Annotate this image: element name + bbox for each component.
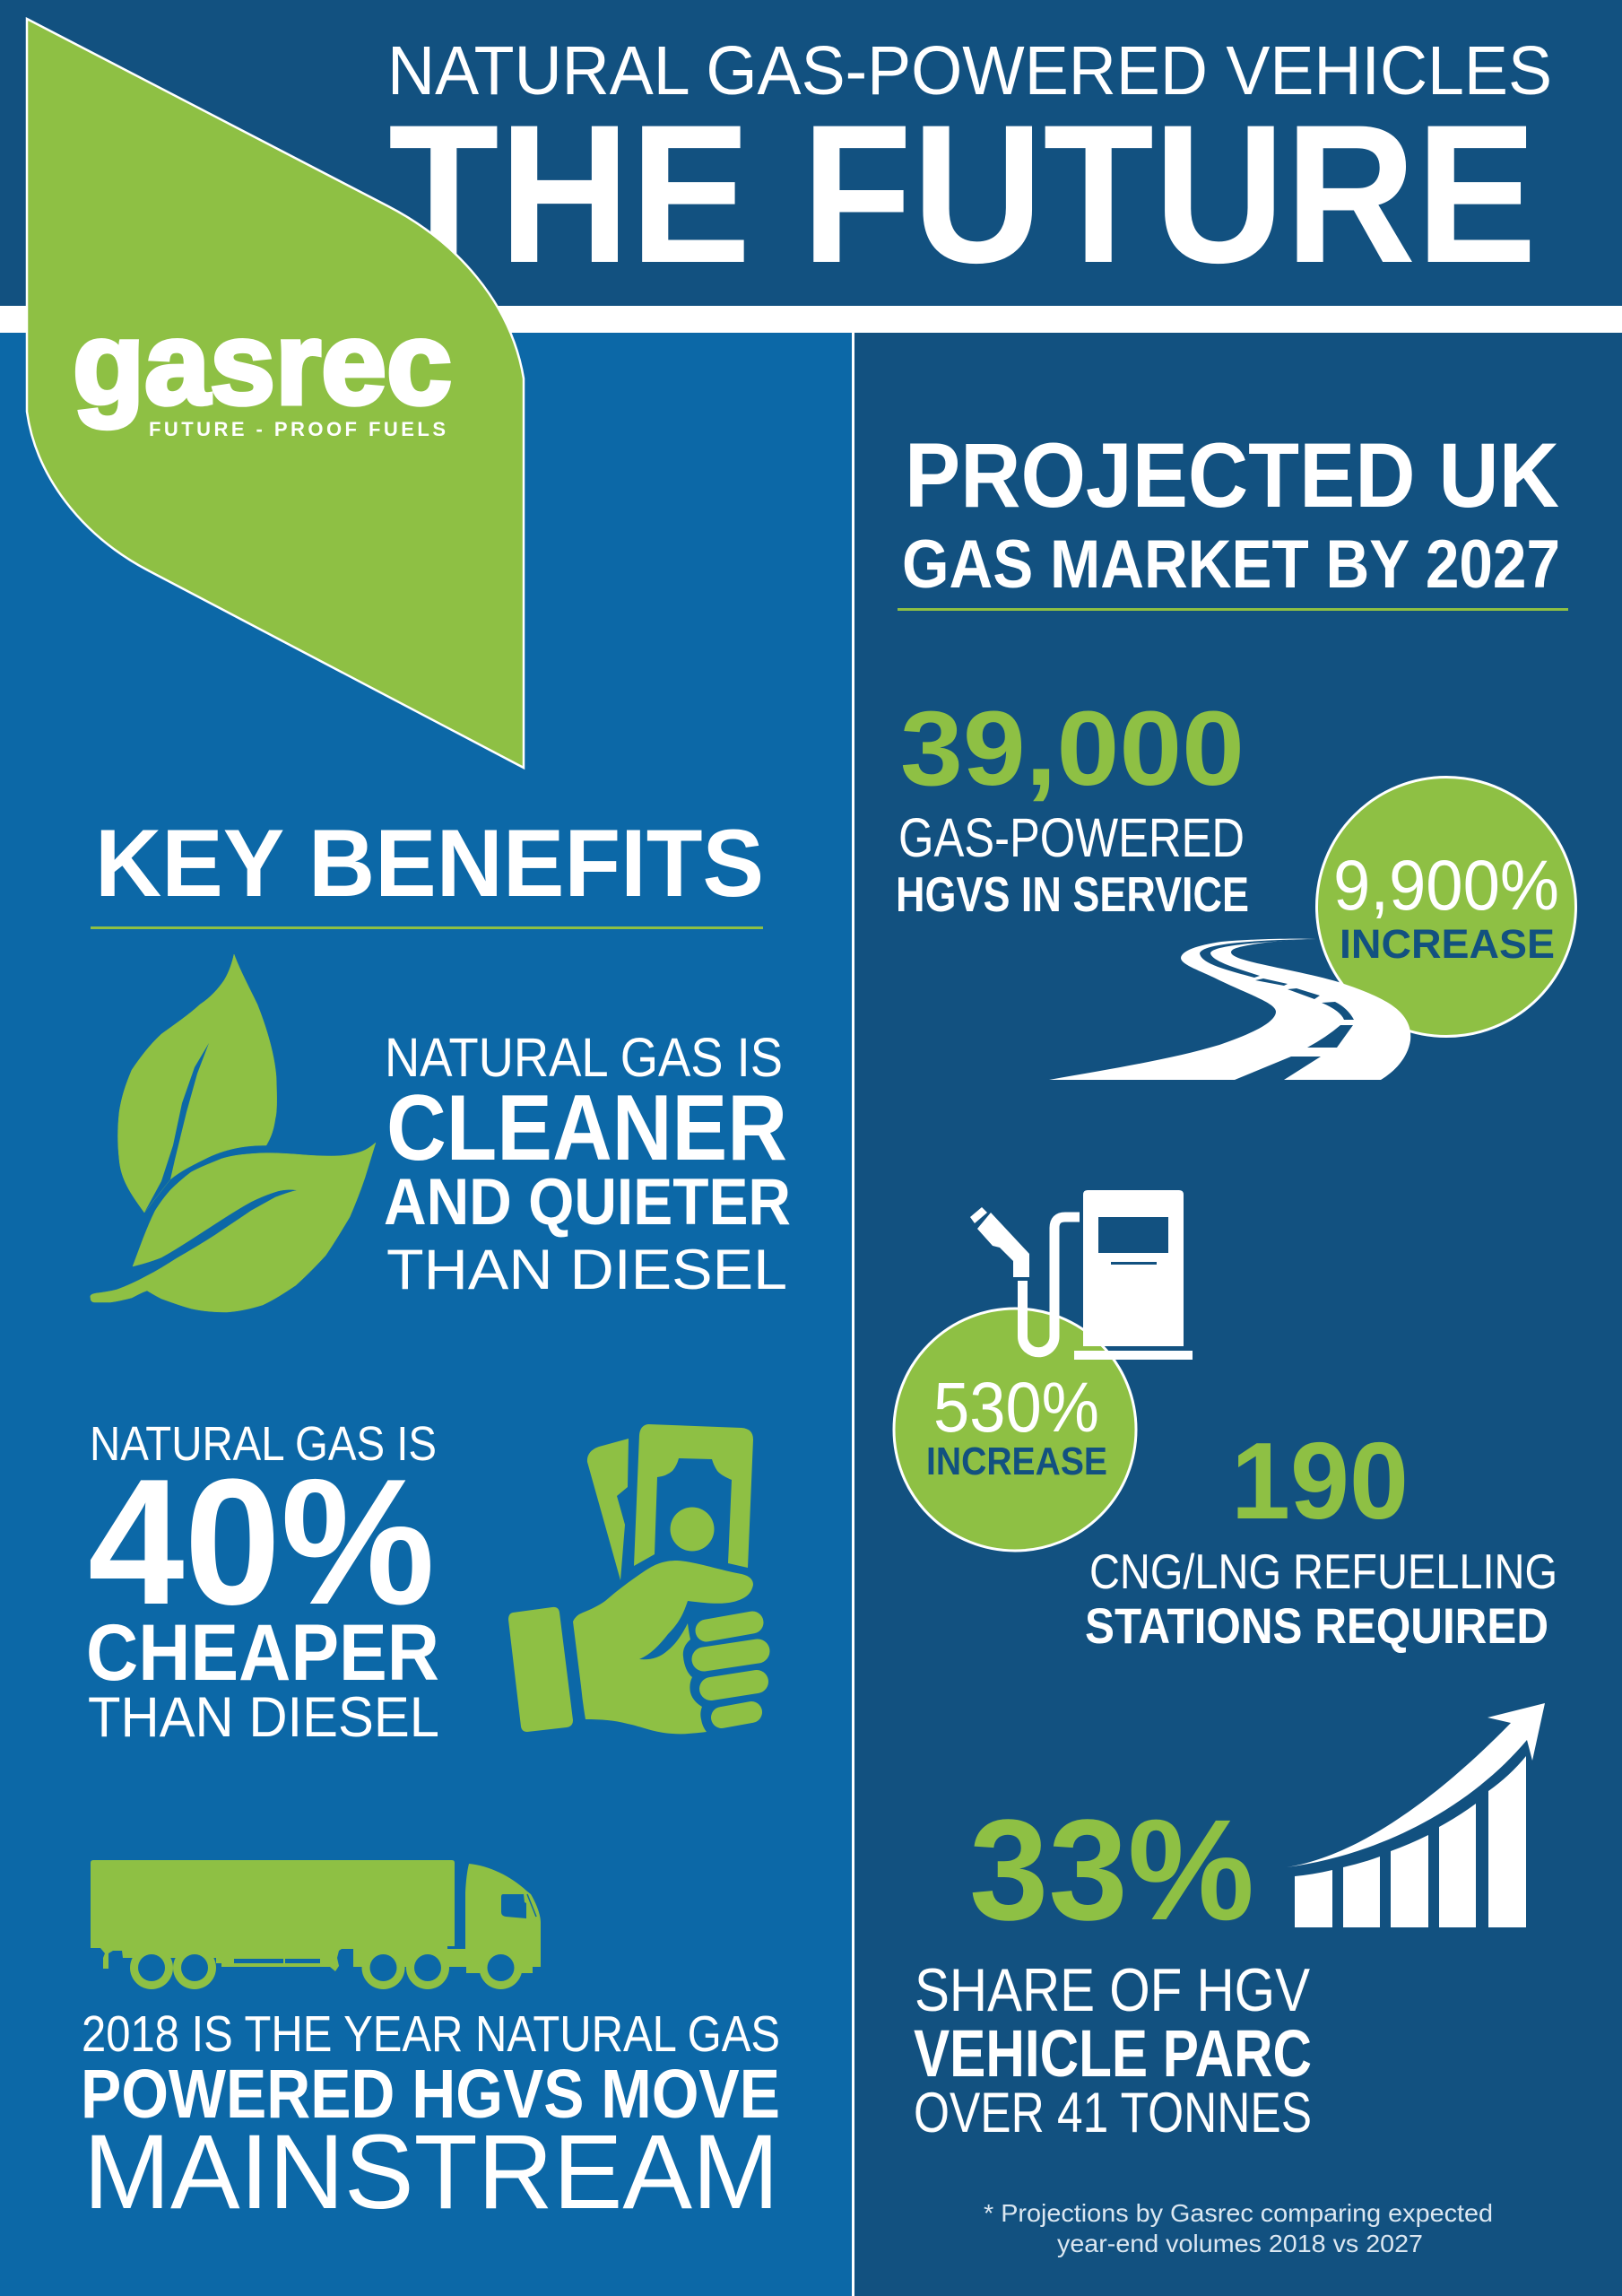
- footnote: * Projections by Gasrec comparing expected: [984, 2199, 1493, 2227]
- icon: two leaves: [91, 954, 376, 1312]
- callout: 530% increase: INCREASE: [926, 1439, 1107, 1483]
- icon: articulated lorry: [91, 1860, 541, 1989]
- callout: 530% increase: [894, 1309, 1136, 1551]
- text: move mainstream: 2018 IS THE YEAR NATURAL GAS: [82, 2005, 780, 2063]
- logo panel: gasrec leaf: [27, 19, 524, 768]
- stat: 39,000 hgvs: HGVS IN SERVICE: [896, 866, 1249, 922]
- stat: 39,000 hgvs: 39,000: [900, 690, 1245, 808]
- panel: key benefits: [81, 809, 791, 2231]
- panel: projected uk gas market: [894, 424, 1576, 2257]
- callout: 9,900% increase: [1316, 777, 1576, 1037]
- text: cleaner and quieter: CLEANER: [386, 1076, 787, 1180]
- stat: 39,000 hgvs: [896, 690, 1249, 922]
- text: move mainstream: POWERED HGVS MOVE: [81, 2056, 780, 2133]
- heading: projected uk gas market by 2027: [898, 424, 1568, 611]
- stat: 190 refuelling stations: 190: [1231, 1420, 1409, 1542]
- logo panel: gasrec leaf: gasrec: [73, 297, 452, 429]
- stat: 33% share: 33%: [969, 1789, 1254, 1950]
- icon: winding road: [1049, 939, 1410, 1080]
- footnote: [984, 2199, 1493, 2257]
- callout: 9,900% increase: 9,900%: [1333, 845, 1559, 925]
- stat: 33% share: OVER 41 TONNES: [914, 2082, 1312, 2144]
- text: cleaner and quieter: THAN DIESEL: [386, 1239, 787, 1301]
- title: THE FUTURE: [388, 83, 1537, 304]
- text: move mainstream: MAINSTREAM: [83, 2113, 779, 2231]
- callout: 9,900% increase: INCREASE: [1340, 921, 1555, 967]
- stat: 190 refuelling stations: [1085, 1420, 1557, 1654]
- stat: 190 refuelling stations: CNG/LNG REFUELLING: [1089, 1544, 1557, 1599]
- text: cleaner and quieter: NATURAL GAS IS: [385, 1027, 783, 1088]
- stat: 190 refuelling stations: STATIONS REQUIRED: [1085, 1597, 1548, 1654]
- text: 40% cheaper: [86, 1417, 439, 1749]
- icon: fuel pump: [970, 1190, 1193, 1360]
- text: 40% cheaper: CHEAPER: [86, 1607, 439, 1697]
- chart: rising bars with arrow: [1287, 1703, 1545, 1927]
- title: NATURAL GAS-POWERED VEHICLES: [387, 32, 1552, 109]
- text: 40% cheaper: NATURAL GAS IS: [90, 1417, 437, 1471]
- text: cleaner and quieter: AND QUIETER: [384, 1166, 791, 1239]
- callout: 530% increase: 530%: [933, 1367, 1099, 1447]
- text: move mainstream: [81, 2005, 780, 2231]
- text: 40% cheaper: THAN DIESEL: [88, 1686, 439, 1749]
- text: cleaner and quieter: [384, 1027, 791, 1301]
- logo panel: gasrec leaf: FUTURE - PROOF FUELS: [149, 418, 446, 440]
- icon: hand holding banknotes: [508, 1424, 758, 1734]
- stat: 39,000 hgvs: GAS-POWERED: [898, 807, 1245, 868]
- stat: 33% share: SHARE OF HGV: [915, 1956, 1311, 2024]
- stat: 33% share: VEHICLE PARC: [914, 2016, 1312, 2091]
- heading: projected uk gas market by 2027: PROJECTED UK: [905, 424, 1559, 526]
- text: 40% cheaper: 40%: [88, 1442, 435, 1642]
- heading: key benefits: KEY BENEFITS: [95, 809, 764, 917]
- heading: projected uk gas market by 2027: GAS MARKET BY 2027: [902, 526, 1560, 603]
- footnote: year-end volumes 2018 vs 2027: [1057, 2230, 1423, 2257]
- stat: 33% share: [914, 1789, 1312, 2144]
